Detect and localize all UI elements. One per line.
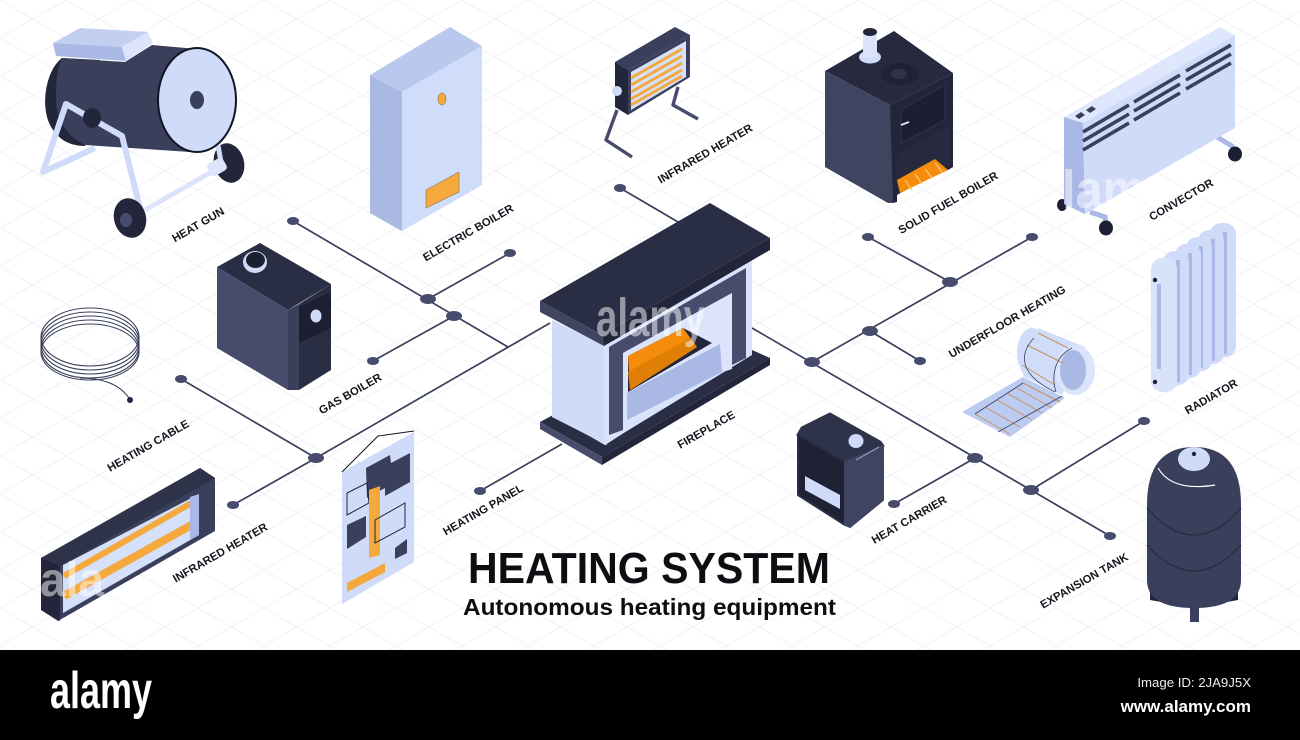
label: underfloor heating: UNDERFLOOR HEATING — [947, 284, 1068, 361]
label: infrared heater top: INFRARED HEATER — [656, 122, 755, 186]
subtitle: Autonomous heating equipment — [463, 594, 836, 620]
icon: heating panel — [342, 431, 414, 604]
base — [540, 350, 770, 465]
label: convector: CONVECTOR — [1147, 177, 1216, 224]
label: solid fuel boiler: SOLID FUEL BOILER — [897, 170, 1000, 237]
icon: heating cable — [41, 308, 139, 403]
icon: fireplace — [540, 203, 770, 465]
footer website: www.alamy.com — [1120, 697, 1251, 716]
icon: heat carrier — [798, 414, 883, 527]
label: electric boiler: ELECTRIC BOILER — [421, 203, 516, 264]
label: radiator: RADIATOR — [1183, 378, 1240, 417]
label: heat carrier: HEAT CARRIER — [870, 494, 949, 547]
label: infrared heater bottom: INFRARED HEATER — [171, 521, 270, 585]
icon: radiator — [1151, 223, 1236, 392]
icon: electric boiler — [370, 27, 482, 231]
footer logo: alamy — [50, 662, 152, 720]
icon: underfloor heating — [962, 328, 1095, 437]
icon: infrared heater small — [606, 27, 698, 157]
icon: solid fuel boiler — [825, 28, 953, 203]
icon: gas boiler — [217, 243, 331, 390]
label: heat gun: HEAT GUN — [170, 206, 227, 245]
connector network — [175, 184, 1150, 540]
watermark: center: alamy — [596, 288, 705, 348]
mantel — [540, 203, 770, 346]
icon: convector — [1057, 27, 1242, 236]
icon: expansion tank — [1147, 447, 1241, 622]
watermark: right: lam — [1062, 160, 1146, 220]
label: fireplace: FIREPLACE — [676, 409, 738, 452]
title: HEATING SYSTEM — [468, 544, 830, 593]
label: heating panel: HEATING PANEL — [441, 483, 526, 538]
footer bar — [0, 650, 1300, 740]
icon: infrared heater large — [41, 468, 215, 621]
footer image id: Image ID: 2JA9J5X — [1137, 675, 1251, 690]
watermark: left: ala — [40, 554, 104, 607]
label: gas boiler: GAS BOILER — [317, 372, 384, 417]
icon: heat gun — [43, 28, 249, 241]
label: expansion tank: EXPANSION TANK — [1038, 551, 1131, 611]
label: heating cable: HEATING CABLE — [106, 418, 192, 475]
